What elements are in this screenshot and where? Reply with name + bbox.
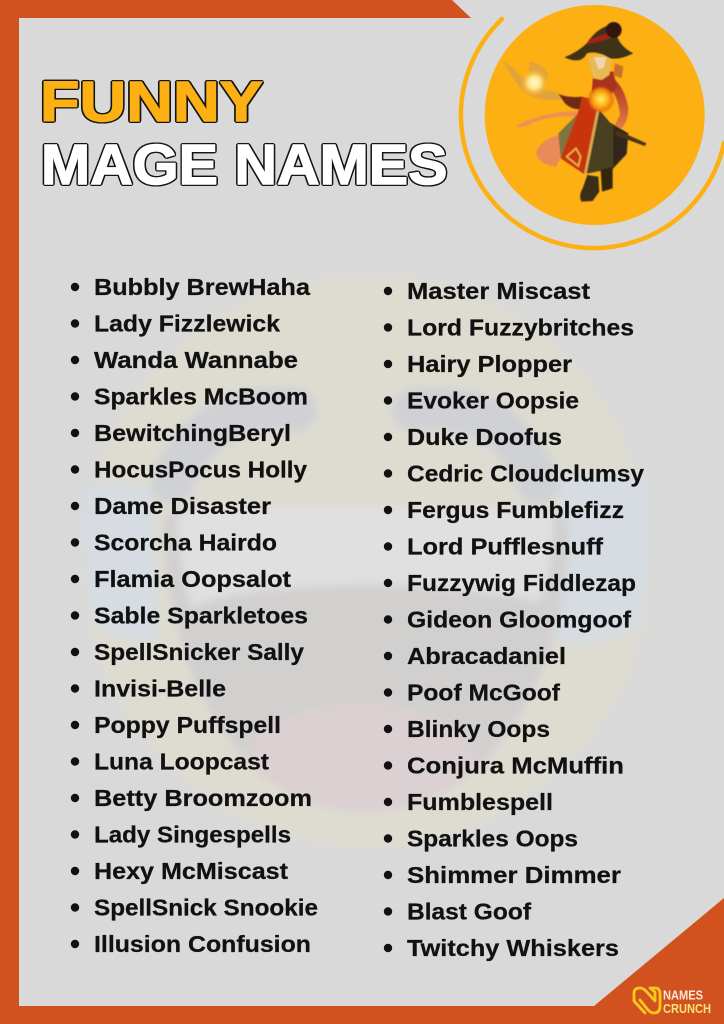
right name column: Lord Fuzzybritches [407,314,634,340]
right name column: Blinky Oops [407,716,550,742]
left name column: Lady Singespells [94,822,291,848]
right name column: Gideon Gloomgoof [407,606,631,632]
right name column: Duke Doofus [407,424,562,450]
logo: Names Crunch [634,988,711,1016]
left name column: HocusPocus Holly [94,456,307,482]
yellow circle [485,5,705,225]
left name column: Hexy McMiscast [94,858,288,884]
right name column: Fergus Fumblefizz [407,497,624,523]
right name column: Fumblespell [407,789,553,815]
right name column: Evoker Oopsie [407,388,579,414]
left name column: Sable Sparkletoes [94,602,308,628]
right name column [384,278,644,961]
background: faded laughing emoji [158,394,562,804]
decorative ring [461,19,724,248]
logo: Names Crunch: CRUNCH [663,1002,711,1016]
right name column: Twitchy Whiskers [407,935,619,961]
right name column: Hairy Plopper [407,351,572,377]
right name column: Fuzzywig Fiddlezap [407,570,636,596]
left name column: Dame Disaster [94,493,271,519]
left name column: Poppy Puffspell [94,712,281,738]
right name column: Blast Goof [407,898,531,924]
right name column: Cedric Cloudclumsy [407,460,644,486]
right name column: Master Miscast [407,278,590,304]
right name column: Abracadaniel [407,643,566,669]
right name column: Sparkles Oops [407,826,578,852]
left name column: SpellSnick Snookie [94,894,318,920]
left name column: BewitchingBeryl [94,420,291,446]
left name column [71,274,318,957]
left name column: Lady Fizzlewick [94,310,281,336]
title: FUNNY [40,70,263,134]
left name column: Betty Broomzoom [94,785,312,811]
left name column: Sparkles McBoom [94,384,308,410]
right name column: Poof McGoof [407,680,560,706]
left name column: Luna Loopcast [94,748,269,774]
title: MAGE NAMES [41,133,447,197]
right name column: Conjura McMuffin [407,752,624,778]
left name column: Invisi-Belle [94,676,226,702]
left name column: SpellSnicker Sally [94,639,304,665]
icon: mage character [502,22,647,202]
left name column: Scorcha Hairdo [94,530,277,556]
left name column: Wanda Wannabe [94,347,298,373]
left name column: Illusion Confusion [94,931,311,957]
title [40,70,448,197]
right name column: Lord Pufflesnuff [407,534,603,560]
logo: Names Crunch: NAMES [663,988,703,1002]
left name column: Bubbly BrewHaha [94,274,311,300]
left name column: Flamia Oopsalot [94,566,291,592]
right name column: Shimmer Dimmer [407,862,621,888]
